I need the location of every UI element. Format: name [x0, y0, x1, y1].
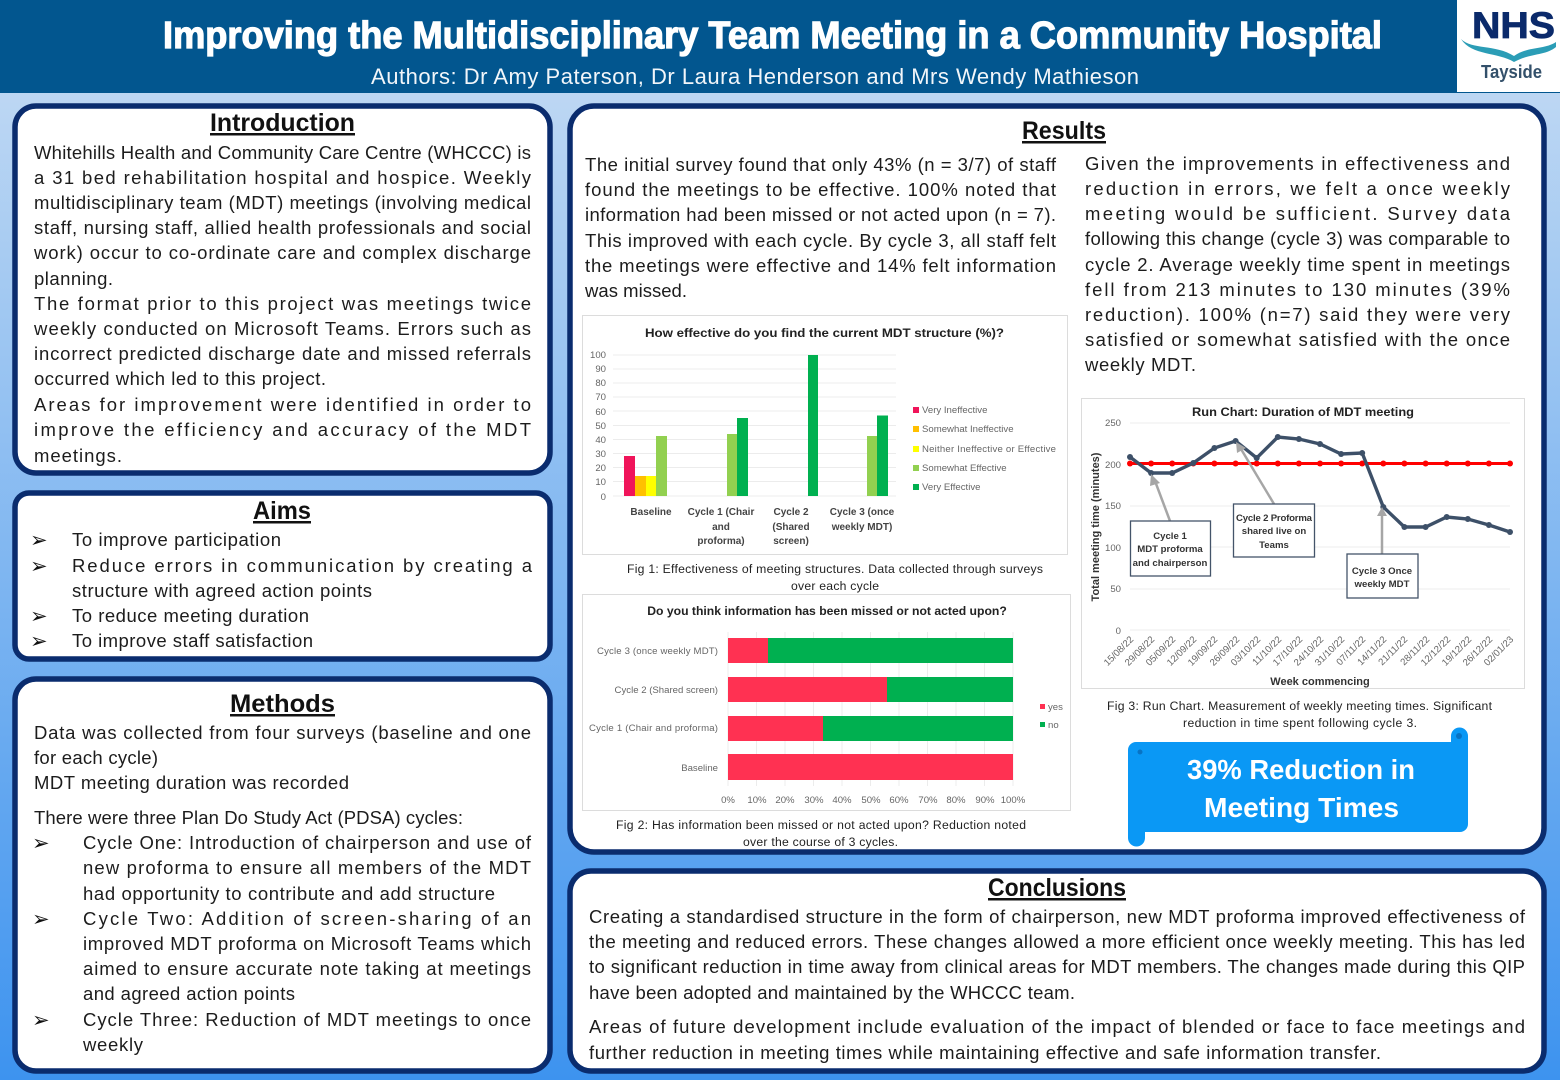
- callout banner: 39% reduction: [1128, 728, 1468, 846]
- callout: cycle 2: Teams: [1259, 540, 1289, 551]
- duration line: [1127, 434, 1513, 535]
- chart title: Run Chart: Duration of MDT meeting: [1192, 405, 1414, 419]
- callout: cycle 2: shared live on: [1242, 526, 1306, 537]
- text block: methods: [32, 722, 532, 1055]
- callout: cycle 1: [1130, 474, 1210, 576]
- x axis dates: 24/10/22: [1292, 634, 1326, 669]
- axis title: y: Total meeting time (minutes): [1090, 452, 1102, 601]
- run chart: duration of MDT meeting: 0: [1116, 626, 1121, 637]
- stacked bar chart: information missed: [582, 594, 1070, 810]
- chart title: How effective do you find the current MDT structure (%)?: [645, 326, 1004, 340]
- text block: introduction: Areas for improvement were identified in order to: [34, 394, 531, 415]
- bar chart: effectiveness of MDT structure: 10: [595, 477, 606, 488]
- text block: results left: The initial survey found that only 43% (n = 3/7) of staff: [585, 154, 1057, 175]
- run chart: duration of MDT meeting: [1082, 398, 1524, 688]
- heading: conclusions: Conclusions: [988, 874, 1126, 902]
- text block: introduction: meetings.: [34, 445, 122, 466]
- bar chart: effectiveness of MDT structure: 50: [595, 421, 606, 432]
- callout: cycle 1: MDT proforma: [1137, 544, 1203, 555]
- text block: methods: weekly: [82, 1034, 144, 1055]
- stacked bar chart: information missed: 40%: [832, 795, 852, 806]
- text block: conclusions: have been adopted and maintained by the WHCCC team.: [589, 982, 1075, 1003]
- text block: introduction: staff, nursing staff, allied health professionals and social: [34, 217, 531, 238]
- text block: results right: weekly MDT.: [1084, 354, 1196, 375]
- text block: results right: [1084, 153, 1511, 375]
- run chart: duration of MDT meeting: 150: [1105, 501, 1121, 512]
- chart title: Do you think information has been missed or not acted upon?: [647, 604, 1007, 618]
- header banner: [0, 0, 1560, 93]
- x axis dates: 03/10/22: [1229, 634, 1263, 669]
- list: aims: structure with agreed action points: [72, 580, 372, 601]
- callout: cycle 3: [1347, 507, 1418, 598]
- x axis dates: 05/09/22: [1144, 634, 1178, 669]
- panel: methods: [15, 679, 550, 1071]
- stacked bar chart: information missed: 50%: [861, 795, 881, 806]
- bar chart: effectiveness of MDT structure: and: [712, 522, 730, 533]
- text block: introduction: weekly conducted on Microsoft Teams. Errors such as: [33, 318, 531, 339]
- bar chart: effectiveness of MDT structure: 100: [590, 350, 606, 361]
- list: aims: [30, 528, 533, 653]
- callout: cycle 2: [1234, 442, 1314, 557]
- x axis dates: 26/12/22: [1461, 634, 1495, 669]
- text block: results right: fell from 213 minutes to 130 minutes (39%: [1085, 279, 1510, 300]
- figure 3 caption: Fig 3: Run Chart. Measurement of weekly meeting times. Significant: [1107, 699, 1493, 713]
- chart legend: [913, 405, 1056, 493]
- heading: methods: Methods: [230, 690, 335, 718]
- text block: introduction: work) occur to co-ordinate care and complex discharge: [33, 242, 531, 263]
- text block: results left: [584, 154, 1057, 301]
- text block: results right: cycle 2. Average weekly time spent in meetings: [1085, 254, 1510, 275]
- benchmark line: [1127, 460, 1513, 466]
- bar chart: effectiveness of MDT structure: Cycle 2: [773, 507, 809, 518]
- run chart: duration of MDT meeting: 200: [1105, 460, 1121, 471]
- stacked bar chart: information missed: 0%: [721, 795, 735, 806]
- x axis dates: 29/08/22: [1123, 634, 1157, 669]
- x axis dates: 02/01/23: [1482, 634, 1516, 669]
- text block: conclusions: [589, 906, 1526, 1063]
- x axis dates: 19/09/22: [1186, 634, 1220, 669]
- panel: results: [570, 106, 1544, 852]
- bar chart: effectiveness of MDT structure: screen): [773, 536, 809, 547]
- text block: methods: ➢: [32, 907, 50, 931]
- list: aims: ➢: [30, 629, 48, 653]
- text block: methods: Data was collected from four surveys (baseline and one: [34, 722, 531, 743]
- chart legend: [1040, 702, 1063, 731]
- callout: cycle 3: Cycle 3 Once: [1352, 566, 1412, 577]
- x axis dates: 12/12/22: [1419, 634, 1453, 669]
- text block: methods: Cycle Three: Reduction of MDT meetings to once: [83, 1009, 531, 1030]
- list: aims: Reduce errors in communication by creating a: [72, 555, 533, 576]
- figure 1 caption: Fig 1: Effectiveness of meeting structures. Data collected through surveys: [627, 562, 1043, 576]
- text block: introduction: a 31 bed rehabilitation hospital and hospice. Weekly: [34, 167, 532, 188]
- list: aims: To improve staff satisfaction: [72, 630, 313, 651]
- stacked bar chart: information missed: 80%: [946, 795, 966, 806]
- text block: methods: new proforma to ensure all members of the MDT: [83, 857, 531, 878]
- bar chart: effectiveness of MDT structure: 80: [595, 378, 606, 389]
- stacked bar chart: information missed: 70%: [918, 795, 938, 806]
- list: aims: ➢: [30, 604, 48, 628]
- text block: conclusions: the meeting and reduced errors. These changes allowed a more efficient once weekly meeting. This has led: [589, 931, 1525, 952]
- chart legend: Somewhat Effective: [922, 463, 1007, 474]
- figure 1 caption: over each cycle: [791, 579, 879, 593]
- x axis dates: 19/12/22: [1440, 634, 1474, 669]
- text block: introduction: occurred which led to this project.: [34, 368, 326, 389]
- text block: methods: had opportunity to contribute and add structure: [83, 883, 495, 904]
- stacked bar chart: information missed: 90%: [975, 795, 995, 806]
- text block: introduction: The format prior to this project was meetings twice: [34, 293, 531, 314]
- bar chart: effectiveness of MDT structure: proforma): [697, 536, 745, 547]
- bar chart: effectiveness of MDT structure: 30: [595, 449, 606, 460]
- stacked bar chart: information missed: 60%: [889, 795, 909, 806]
- title: Improving the Multidisciplinary Team Meeting in a Community Hospital: [163, 15, 1382, 57]
- figure 3 caption: reduction in time spent following cycle 3.: [1183, 716, 1417, 730]
- text block: methods: Cycle Two: Addition of screen-sharing of an: [83, 908, 531, 929]
- text block: results right: satisfied or somewhat satisfied with the once: [1085, 329, 1510, 350]
- run chart: duration of MDT meeting: 50: [1110, 584, 1121, 595]
- text block: introduction: multidisciplinary team (MDT) meetings (involving medical: [34, 192, 531, 213]
- text block: introduction: [33, 142, 532, 466]
- figure 2 caption: Fig 2: Has information been missed or not acted upon? Reduction noted: [616, 818, 1026, 832]
- chart legend: Somewhat Ineffective: [922, 424, 1014, 435]
- bar chart: effectiveness of MDT structure: Cycle 1 (Chair: [688, 507, 754, 518]
- panel: introduction: [15, 106, 550, 473]
- text block: results left: found the meetings to be effective. 100% noted that: [585, 179, 1056, 200]
- chart legend: Very Effective: [922, 482, 980, 493]
- text block: introduction: Whitehills Health and Community Care Centre (WHCCC) is: [34, 142, 531, 163]
- text block: introduction: improve the efficiency and accuracy of the MDT: [34, 419, 531, 440]
- chart legend: yes: [1048, 702, 1063, 713]
- list: aims: To reduce meeting duration: [72, 605, 309, 626]
- text block: methods: ➢: [32, 1008, 50, 1032]
- bar chart: effectiveness of MDT structure: Baseline: [630, 507, 672, 518]
- heading: introduction: Introduction: [210, 109, 355, 137]
- callout: cycle 1: and chairperson: [1133, 558, 1207, 569]
- text block: methods: There were three Plan Do Study Act (PDSA) cycles:: [34, 807, 463, 828]
- stacked bar chart: information missed: Baseline: [681, 763, 718, 774]
- panel: aims: [15, 493, 550, 659]
- bar chart: effectiveness of MDT structure: 90: [595, 364, 606, 375]
- stacked bar chart: information missed: Cycle 1 (Chair and proforma): [589, 723, 718, 734]
- text block: methods: ➢: [32, 831, 50, 855]
- stacked bar chart: information missed: 30%: [804, 795, 824, 806]
- figure 2 caption: [616, 818, 1026, 849]
- stacked bar chart: information missed: 20%: [775, 795, 795, 806]
- figure 1 caption: [627, 562, 1043, 593]
- stacked bar chart: information missed: Cycle 3 (once weekly MDT): [597, 646, 718, 657]
- x axis dates: 12/09/22: [1165, 634, 1199, 669]
- icon: NHS Tayside logo: [1457, 0, 1560, 92]
- x axis dates: 11/10/22: [1250, 634, 1284, 668]
- text block: results right: reduction in errors, we felt a once weekly: [1085, 178, 1511, 199]
- axis title: x: Week commencing: [1270, 676, 1370, 688]
- text block: methods: Cycle One: Introduction of chairperson and use of: [83, 832, 532, 853]
- x axis dates: [1102, 634, 1516, 669]
- bar chart: effectiveness of MDT structure: [582, 316, 1068, 554]
- callout banner: 39% reduction: Meeting Times: [1204, 792, 1399, 823]
- run chart: duration of MDT meeting: 250: [1105, 418, 1121, 429]
- bar chart: effectiveness of MDT structure: 70: [595, 392, 606, 403]
- callout: cycle 1: Cycle 1: [1153, 531, 1187, 542]
- text block: results right: following this change (cycle 3) was comparable to: [1085, 228, 1510, 249]
- text block: results left: This improved with each cycle. By cycle 3, all staff felt: [585, 230, 1056, 251]
- text block: results right: Given the improvements in effectiveness and: [1085, 153, 1510, 174]
- bar chart: effectiveness of MDT structure: 40: [595, 435, 606, 446]
- text block: results left: was missed.: [584, 280, 687, 301]
- callout: cycle 3: weekly MDT: [1354, 579, 1410, 590]
- figure 3 caption: [1107, 699, 1493, 730]
- bar chart: effectiveness of MDT structure: Cycle 3 (once: [830, 507, 895, 518]
- list: aims: ➢: [30, 554, 48, 578]
- list: aims: To improve participation: [72, 529, 281, 550]
- callout banner: 39% reduction: 39% Reduction in: [1187, 754, 1415, 785]
- bar chart: effectiveness of MDT structure: weekly MDT): [831, 522, 892, 533]
- icon: NHS Tayside logo: Tayside: [1481, 62, 1542, 82]
- stacked bar chart: information missed: Cycle 2 (Shared screen): [615, 685, 718, 696]
- stacked bar chart: information missed: 100%: [1001, 795, 1026, 806]
- x axis dates: 31/10/22: [1313, 634, 1347, 669]
- stacked bar chart: information missed: 10%: [747, 795, 767, 806]
- text block: results left: the meetings were effective and 14% felt information: [585, 255, 1056, 276]
- callout: cycle 2: Cycle 2 Proforma: [1236, 513, 1313, 524]
- x axis dates: 17/10/22: [1271, 634, 1305, 669]
- text block: methods: and agreed action points: [83, 983, 295, 1004]
- bar chart: effectiveness of MDT structure: 0: [601, 492, 606, 503]
- x axis dates: 14/11/22: [1355, 634, 1389, 668]
- text block: conclusions: Areas of future development include evaluation of the impact of blended or face to face meetings and: [589, 1016, 1525, 1037]
- bar chart: effectiveness of MDT structure: (Shared: [772, 522, 810, 533]
- text block: methods: aimed to ensure accurate note taking at meetings: [83, 958, 531, 979]
- text block: results right: reduction). 100% (n=7) said they were very: [1085, 304, 1511, 325]
- text block: methods: for each cycle): [34, 747, 158, 768]
- text block: conclusions: Creating a standardised structure in the form of chairperson, new MDT proforma improved effectiveness of: [589, 906, 1526, 927]
- heading: results: Results: [1022, 117, 1106, 145]
- figure 2 caption: over the course of 3 cycles.: [743, 835, 898, 849]
- x axis dates: 07/11/22: [1334, 634, 1368, 668]
- text block: results left: information had been missed or not acted upon (n = 7).: [585, 204, 1056, 225]
- text block: introduction: incorrect predicted discharge date and missed referrals: [34, 343, 531, 364]
- x axis dates: 28/11/22: [1398, 634, 1432, 668]
- x axis dates: 15/08/22: [1102, 634, 1136, 669]
- bar chart: effectiveness of MDT structure: 20: [595, 463, 606, 474]
- chart legend: Neither Ineffective or Effective: [922, 444, 1056, 455]
- text block: results right: meeting would be sufficient. Survey data: [1085, 203, 1511, 224]
- text block: methods: improved MDT proforma on Microsoft Teams which: [83, 933, 531, 954]
- text block: conclusions: to significant reduction in time away from clinical areas for MDT members. The changes made during this QIP: [589, 956, 1525, 977]
- x axis dates: 26/09/22: [1208, 634, 1242, 669]
- text block: methods: MDT meeting duration was recorded: [34, 772, 349, 793]
- chart legend: no: [1048, 720, 1059, 731]
- text block: conclusions: further reduction in meeting times while maintaining effective and safe information transfer.: [589, 1042, 1381, 1063]
- bar chart: effectiveness of MDT structure: 60: [595, 407, 606, 418]
- icon: NHS Tayside logo: NHS: [1472, 5, 1555, 46]
- authors: Authors: Dr Amy Paterson, Dr Laura Henderson and Mrs Wendy Mathieson: [371, 64, 1139, 89]
- text block: introduction: planning.: [34, 268, 113, 289]
- x axis dates: 21/11/22: [1376, 634, 1410, 668]
- list: aims: ➢: [30, 528, 48, 552]
- chart legend: Very Ineffective: [922, 405, 987, 416]
- panel: conclusions: [570, 871, 1544, 1071]
- run chart: duration of MDT meeting: 100: [1105, 543, 1121, 554]
- heading: aims: Aims: [253, 497, 311, 525]
